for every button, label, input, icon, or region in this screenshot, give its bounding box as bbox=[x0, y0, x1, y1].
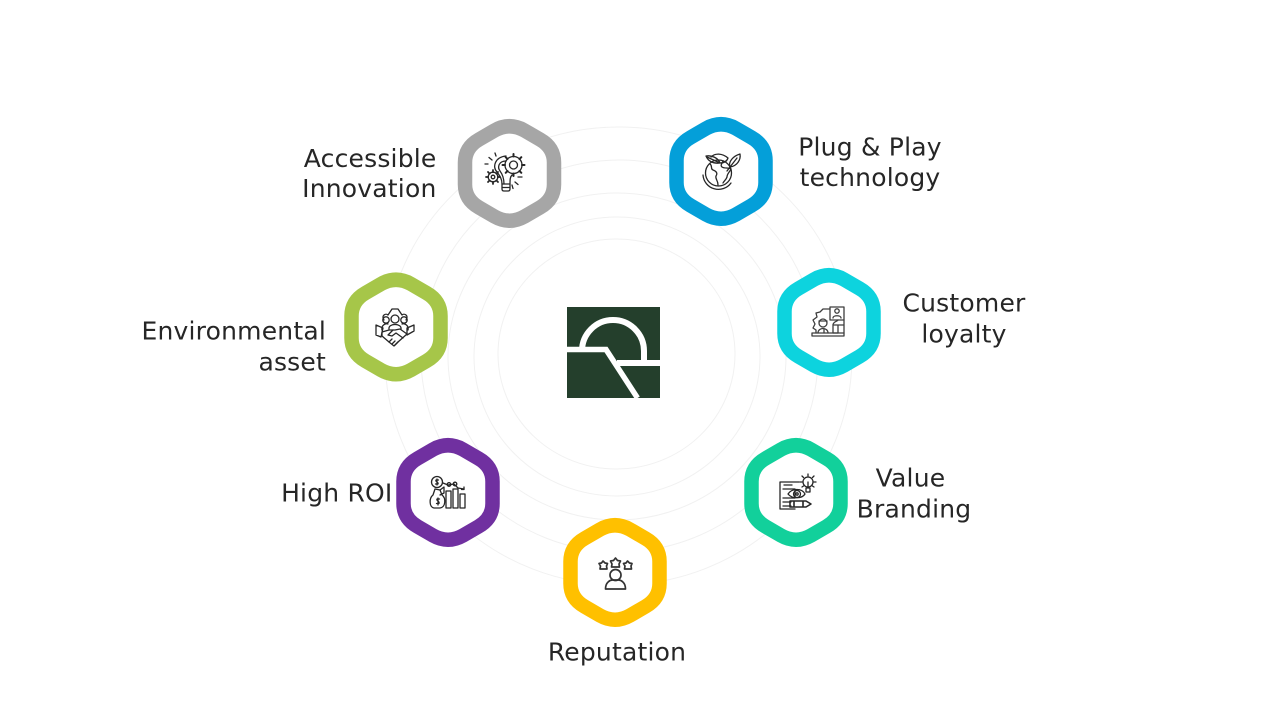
hexagon: grey bbox=[465, 126, 554, 221]
label: Accessible bbox=[304, 144, 436, 173]
node: Reputation bbox=[548, 525, 686, 666]
node: Accessible Innovation bbox=[302, 126, 554, 221]
hexagon: purple bbox=[404, 445, 492, 540]
hexagon: lime bbox=[352, 280, 440, 374]
hexagon: yellow bbox=[570, 525, 660, 620]
label: Environmental bbox=[142, 316, 326, 346]
node: Environmental asset bbox=[142, 280, 440, 376]
hexagon: cyan bbox=[784, 275, 874, 370]
icon: handshake and team gear bbox=[376, 309, 414, 346]
label: loyalty bbox=[921, 320, 1007, 348]
hexagon: blue bbox=[676, 124, 766, 219]
label: Plug & Play bbox=[798, 132, 942, 162]
icon: globe with leaves bbox=[703, 154, 740, 189]
label: Innovation bbox=[302, 174, 436, 203]
node: Customer loyalty bbox=[784, 275, 1026, 370]
central logo bbox=[567, 307, 660, 398]
label: Value bbox=[876, 464, 945, 492]
node: High ROI bbox=[281, 445, 492, 540]
icon: light bulb with gears bbox=[485, 153, 524, 191]
icon: document, eye, pen and bulb bbox=[780, 474, 816, 509]
node: Value Branding bbox=[752, 445, 971, 540]
icon: money bag and bar chart bbox=[430, 476, 465, 508]
label: High ROI bbox=[281, 478, 392, 508]
icon: person with three stars bbox=[599, 558, 632, 589]
hexagon: green bbox=[752, 445, 840, 540]
node: Plug & Play technology bbox=[676, 124, 942, 219]
label: Branding bbox=[857, 494, 971, 524]
label: Reputation bbox=[548, 638, 686, 666]
icon: customer and laptop bbox=[812, 307, 844, 336]
label: Customer bbox=[902, 288, 1026, 318]
label: asset bbox=[258, 348, 326, 376]
label: technology bbox=[800, 163, 940, 192]
